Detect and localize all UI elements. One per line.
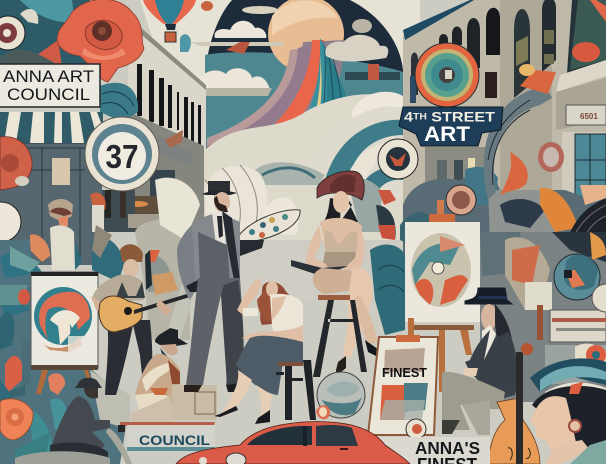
figure: violin (487, 343, 540, 464)
panel: small text placard (545, 310, 606, 385)
panel: rainbow waterfall (207, 38, 352, 182)
panel: swirling cream clouds (205, 92, 403, 300)
panel: top-left foliage (0, 0, 90, 66)
panel: Finest painting board (368, 337, 438, 435)
icon: hot air balloon (143, 0, 213, 42)
icon: globe near finest board (303, 360, 365, 420)
figure: woman portrait bottom right (530, 358, 606, 464)
icon: blue striped leaf below rose (100, 83, 138, 122)
sign: 4th Street Art: ART (424, 123, 470, 146)
sign: Anna Art Council (0, 64, 100, 107)
figure: man riding scooter (15, 378, 132, 464)
icon: red car (176, 422, 410, 464)
icon: street column under sign (425, 147, 490, 207)
icon: small teal figure in the arch (180, 34, 191, 52)
icon: cream target disc (378, 139, 418, 179)
panel: Finest painting board: FINEST (382, 366, 427, 380)
panel: clouds and plane (190, 21, 400, 96)
icon: teal sphere (554, 254, 600, 300)
sign: 4th Street Art: TH (413, 112, 427, 122)
panel: collage lower right (480, 232, 606, 402)
sign: Anna Art Council: COUNCIL (7, 85, 90, 104)
round artwork (411, 233, 471, 307)
sign: Anna Art Council: ANNA ART (3, 67, 94, 86)
palette (236, 210, 300, 243)
figure: man in grey suit with palette (177, 181, 300, 392)
hair (320, 195, 358, 225)
icon: swirling grey tentacle with orange scarf (484, 64, 556, 200)
panel: left building (100, 26, 206, 232)
sign: Council (127, 425, 215, 451)
swirl artwork (34, 287, 92, 354)
text: Anna's Finest (377, 437, 490, 464)
sign: 4th Street Art (399, 107, 503, 146)
panel: collage behind guitarist (135, 178, 210, 340)
sign: 4th Street Art: STREET (427, 108, 496, 124)
icon: cream disc at right (592, 284, 606, 312)
panel: sky arch (140, 0, 420, 200)
panel: easel with round art (396, 200, 480, 392)
panel: teal swirl right of woman (370, 245, 405, 335)
text: Anna's Finest: ANNA'S (415, 438, 480, 458)
icon: large red rose (57, 0, 144, 82)
badge: number 37 (85, 117, 159, 191)
figure: seated woman with hat (291, 171, 382, 377)
wooden stool (313, 295, 367, 377)
stool (276, 362, 303, 420)
figure: seated artist with hat (442, 288, 517, 435)
figure: guitarist (91, 244, 190, 395)
figure: seated hatted person (135, 328, 188, 425)
icon: concentric ring above street sign (415, 43, 479, 107)
icon: striped cream disc (0, 202, 21, 242)
awning (0, 112, 103, 143)
panel: right building: 6501 (580, 112, 598, 121)
figure: red-haired seated woman (214, 278, 303, 424)
sign: Council: COUNCIL (139, 433, 210, 448)
panel: notebook painting (31, 272, 98, 394)
badge: number 37: 37 (106, 138, 138, 175)
panel: right building (403, 0, 606, 232)
panel: sketch papers behind seated figure (120, 385, 217, 426)
sign: 4th Street Art: 4 (404, 108, 412, 124)
icon: rose on storefront (0, 137, 32, 190)
icon: small orange disc on board (406, 419, 426, 439)
panel: collage mid right (376, 142, 606, 300)
panel: lower-left foliage (0, 240, 130, 464)
icon: orange flower (0, 399, 33, 440)
panel: storefront (0, 112, 125, 282)
